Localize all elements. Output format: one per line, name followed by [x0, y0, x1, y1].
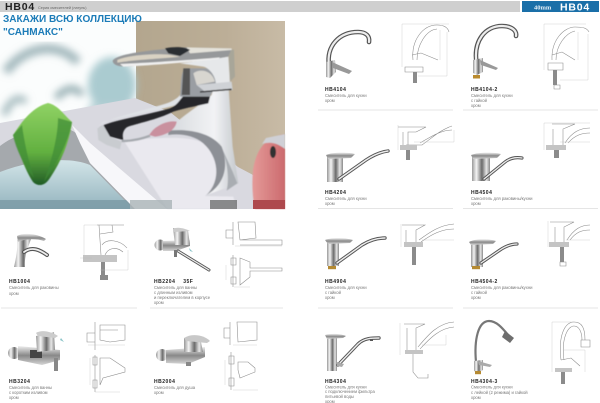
icon: HB4104-2 faucet	[473, 26, 516, 78]
technical drawing HB2204	[226, 222, 282, 287]
icon: HB4504-2 faucet	[469, 239, 517, 269]
HB3204 label	[9, 379, 52, 400]
product: HB4304-3	[471, 321, 590, 400]
HB2204 label: хром	[154, 300, 164, 305]
HB4304 label: Смеситель для кухни	[325, 384, 367, 390]
product: HB4204	[325, 125, 454, 206]
HB4104 label: HB4104	[325, 87, 346, 93]
HB4504-2 label	[471, 279, 533, 300]
faucet cap	[180, 57, 230, 85]
icon: HB3204 faucet	[8, 331, 64, 371]
icon: HB1004 faucet	[14, 234, 47, 267]
HB2004 label: HB2004	[154, 379, 175, 385]
technical drawing HB3204	[87, 322, 125, 392]
product: HB2204	[154, 222, 282, 305]
HB2004 label	[154, 379, 196, 395]
icon: HB4204 faucet	[326, 151, 388, 182]
header tab: size and series: 40mm	[534, 4, 552, 12]
technical drawing HB2004	[224, 322, 258, 390]
HB4304 label	[325, 379, 375, 403]
HB4204 label	[325, 190, 367, 206]
icon: HB2204 faucet	[154, 228, 209, 270]
blurred reflection in mirror	[4, 49, 136, 117]
HB4104 label	[325, 87, 367, 103]
HB4304 label: HB4304	[325, 379, 346, 385]
HB4304-3 label: HB4304-3	[471, 379, 498, 385]
HB4504-2 label: с гайкой	[471, 290, 488, 295]
HB4504-2 label: HB4504-2	[471, 279, 498, 285]
faucet spout	[98, 95, 187, 126]
technical drawing HB4104-2	[544, 24, 589, 89]
HB3204 label: хром	[9, 395, 19, 400]
product: HB2004	[154, 322, 258, 395]
HB3204 label: HB3204	[9, 379, 30, 385]
product: HB4904	[325, 224, 454, 300]
product: HB3204	[8, 322, 125, 400]
icon: HB4304-3 faucet	[474, 321, 514, 374]
icon: HB2004 faucet	[156, 335, 210, 366]
HB4504 label: Смеситель для раковины/кухни	[471, 196, 533, 201]
icon: HB4304 faucet	[325, 334, 379, 371]
HB4304-3 label	[471, 379, 528, 400]
technical drawing HB4104	[402, 24, 449, 83]
HB1004 label: HB1004	[9, 279, 30, 285]
HB4304 label: с подключением фильтра	[325, 389, 375, 394]
technical drawing HB1004	[80, 225, 128, 280]
HB2204 label: с длинным изливом	[154, 290, 193, 295]
icon: HB4904 faucet	[325, 238, 385, 269]
HB4104-2 label: хром	[471, 103, 481, 108]
HB4904 label: Смеситель для кухни	[325, 285, 367, 290]
HB2004 label: хром	[154, 390, 164, 395]
icon: green leaf soap	[13, 103, 72, 185]
HB4104-2 label	[471, 87, 513, 108]
HB2204 label	[154, 279, 211, 305]
HB2204 label: Смеситель для ванны	[154, 285, 197, 290]
basin faucet	[97, 47, 238, 209]
icon: HB4104 faucet	[326, 32, 369, 78]
HB4204 label: хром	[325, 201, 335, 206]
photo background	[0, 21, 285, 209]
sink top	[0, 98, 255, 209]
HB4904 label: с гайкой	[325, 290, 342, 295]
header tab: size and series	[534, 2, 590, 14]
technical drawing HB4504	[544, 123, 590, 158]
product: HB4304	[325, 322, 454, 403]
icon: HB4504 faucet	[471, 153, 522, 181]
HB4104-2 label: с гайкой	[471, 98, 488, 103]
photo bottom strip	[130, 200, 285, 209]
HB1004 label: Смеситель для раковины	[9, 285, 59, 290]
HB2004 label: Смеситель для душа	[154, 385, 196, 390]
HB4104-2 label: Смеситель для кухни	[471, 93, 513, 98]
HB3204 label: Смеситель для ванны	[9, 385, 52, 390]
HB1004 label: хром	[9, 291, 19, 296]
product: HB1004	[9, 225, 128, 296]
HB4504 label: хром	[471, 201, 481, 206]
technical drawing HB4504-2	[548, 221, 590, 266]
HB2204 label: и переключателем в корпусе	[154, 295, 211, 300]
basin	[0, 128, 135, 209]
HB4904 label: HB4904	[325, 279, 346, 285]
HB1004 label	[9, 279, 59, 296]
product: HB4504	[471, 123, 590, 206]
HB4104 label: хром	[325, 98, 335, 103]
HB4304-3 label: Смеситель для кухни	[471, 384, 513, 390]
technical drawing HB4904	[401, 224, 454, 265]
HB4904 label	[325, 279, 367, 300]
product: HB4104-2	[471, 24, 589, 108]
faucet loop handle	[113, 47, 232, 67]
HB3204 label: с коротким изливом	[9, 390, 48, 395]
faucet base sink surface	[123, 138, 237, 209]
title: "САНМАКС"	[3, 27, 63, 38]
header caption: Серия смесителей (латунь)	[38, 6, 87, 10]
product: HB4104	[325, 24, 449, 103]
HB4304 label: питьевой воды	[325, 394, 354, 399]
title	[3, 14, 142, 38]
HB4204 label: HB4204	[325, 190, 346, 196]
HB4104-2 label: HB4104-2	[471, 87, 498, 93]
technical drawing HB4304	[400, 322, 454, 378]
HB4204 label: Смеситель для кухни	[325, 196, 367, 201]
HB4104 label: Смеситель для кухни	[325, 93, 367, 98]
technical drawing HB4304-3	[552, 322, 590, 384]
basin rim	[72, 125, 167, 209]
header tab: size and series: HB04	[560, 2, 590, 14]
title: ЗАКАЖИ ВСЮ КОЛЛЕКЦИЮ	[3, 14, 142, 25]
faucet neck	[180, 68, 216, 97]
HB4504-2 label: хром	[471, 295, 481, 300]
header series code: HB04	[5, 1, 35, 13]
faucet body	[170, 83, 238, 195]
HB4304-3 label: с лейкой (2 режима) и гайкой	[471, 390, 528, 395]
header band	[0, 1, 599, 12]
HB4504-2 label: Смеситель для раковины/кухни	[471, 285, 533, 290]
pink object	[252, 134, 285, 209]
product: HB4504-2	[469, 221, 590, 300]
HB2204 label: HB2204 35F	[154, 279, 193, 285]
HB4504 label	[471, 190, 533, 206]
HB4904 label: хром	[325, 295, 335, 300]
technical drawing HB4204	[398, 125, 454, 160]
HB4504 label: HB4504	[471, 190, 492, 196]
HB4304-3 label: хром	[471, 395, 481, 400]
panel: hero photo of basin faucet	[0, 21, 285, 209]
